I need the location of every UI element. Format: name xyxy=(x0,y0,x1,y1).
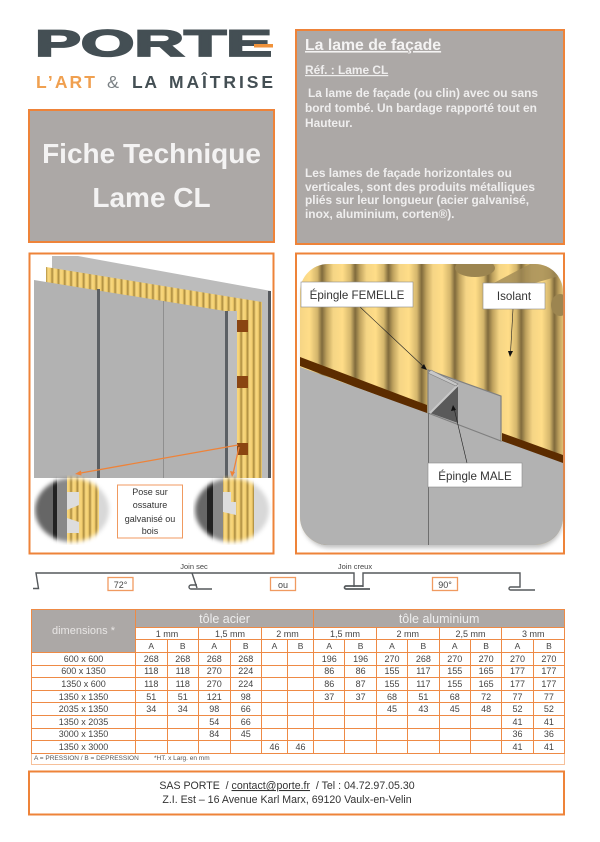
contact text: Z.I. Est – 16 Avenue Karl Marx, 69120 Vaulx-en-Velin xyxy=(162,794,412,806)
pressure table: A xyxy=(452,641,458,651)
pressure table: 1 mm xyxy=(156,628,178,638)
pressure table xyxy=(31,609,565,765)
pressure table: B xyxy=(483,641,489,651)
profile line xyxy=(33,573,535,590)
pressure table: 270 xyxy=(207,679,222,689)
pressure table: 41 xyxy=(544,717,554,727)
description text: Hauteur. xyxy=(305,116,353,130)
detail circle left xyxy=(30,475,115,545)
pressure table: 98 xyxy=(241,692,251,702)
pressure table: A xyxy=(515,641,520,651)
pressure table: B xyxy=(421,641,426,651)
pressure table: dimensions * xyxy=(52,625,115,637)
logo: PORTE xyxy=(35,23,273,92)
callout: pose xyxy=(118,485,182,538)
pressure table: 165 xyxy=(479,679,494,689)
profile diagram xyxy=(33,562,535,590)
detail circle right xyxy=(190,475,275,545)
description text: Les lames de façade horizontales ou xyxy=(305,166,512,180)
pressure table: 68 xyxy=(387,692,397,702)
male clip xyxy=(428,370,501,441)
pressure table: 224 xyxy=(238,666,253,676)
label: épingle femelle: Épingle FEMELLE xyxy=(310,289,405,302)
pressure table: 1,5 mm xyxy=(330,628,360,638)
pressure table: 52 xyxy=(512,704,523,714)
pressure table: A xyxy=(389,641,395,651)
pressure table: 48 xyxy=(481,704,491,714)
pressure table: 118 xyxy=(176,679,190,689)
pressure table: 52 xyxy=(544,704,554,714)
label: épingle male xyxy=(428,463,522,487)
pressure table: 2035 x 1350 xyxy=(59,704,108,714)
pressure table: 600 x 1350 xyxy=(61,666,106,676)
pressure table: 45 xyxy=(241,729,251,739)
label: épingle femelle xyxy=(301,282,413,307)
title text xyxy=(42,138,261,213)
arrow: épingle male xyxy=(451,405,467,463)
pressure table: 117 xyxy=(416,679,431,689)
contact text xyxy=(159,780,415,806)
pressure table: 155 xyxy=(384,679,400,689)
pressure table: 600 x 600 xyxy=(64,654,103,664)
pressure table: 51 xyxy=(146,692,156,702)
pressure table: 177 xyxy=(541,666,556,676)
pressure table: 270 xyxy=(510,654,525,664)
pressure table: 118 xyxy=(176,666,190,676)
label: 72 degrees xyxy=(108,578,133,590)
pressure table: 66 xyxy=(241,717,251,727)
arrow to left detail xyxy=(75,445,238,476)
description text: inox, aluminium, corten®). xyxy=(305,207,454,221)
description text: La lame de façade (ou clin) avec ou sans xyxy=(308,86,538,100)
label: 90 degrees: 90° xyxy=(438,580,452,590)
label: 90 degrees xyxy=(432,578,458,590)
callout: pose: ossature xyxy=(133,500,167,510)
logo tagline: L’ART xyxy=(36,72,95,92)
title text: Lame CL xyxy=(92,182,211,213)
pressure table: 155 xyxy=(384,666,400,676)
pressure table: 1350 x 2035 xyxy=(59,717,108,727)
label: isolant xyxy=(483,283,545,309)
label: 72 degrees: 72° xyxy=(114,580,128,590)
pressure table: 224 xyxy=(238,679,253,689)
pressure table: 270 xyxy=(207,666,222,676)
pressure table: 2 mm xyxy=(276,628,299,638)
pressure table: 77 xyxy=(512,692,523,702)
description text: bord tombé. Un bardage rapporté tout en xyxy=(305,101,537,115)
pressure table: 196 xyxy=(322,654,337,664)
callout: pose: galvanisé ou xyxy=(125,514,175,524)
pressure table: 36 xyxy=(544,729,554,739)
pressure table: 51 xyxy=(418,692,428,702)
label: ou: ou xyxy=(278,580,288,590)
pressure table: 77 xyxy=(544,692,554,702)
title text: Fiche Technique xyxy=(42,138,261,169)
pressure table: 2 mm xyxy=(396,628,419,638)
arrow to right detail xyxy=(230,447,239,477)
logo tagline xyxy=(36,71,273,92)
pressure table: 117 xyxy=(416,666,431,676)
pressure table: 72 xyxy=(481,692,491,702)
pressure table: 270 xyxy=(541,654,556,664)
label: join creux: Join creux xyxy=(338,562,372,571)
pressure table: 1,5 mm xyxy=(215,628,245,638)
pressure table: 37 xyxy=(324,692,334,702)
pressure table: 121 xyxy=(207,692,222,702)
pressure table: A xyxy=(211,641,217,651)
pressure table: 36 xyxy=(512,729,523,739)
pressure table: 43 xyxy=(418,704,428,714)
pressure table: 1350 x 3000 xyxy=(59,742,108,752)
pressure table: tôle aluminium xyxy=(399,612,479,626)
label: isolant: Isolant xyxy=(497,290,532,303)
contact footer xyxy=(29,772,564,814)
pressure table: 270 xyxy=(479,654,494,664)
reference: Réf. : Lame CL xyxy=(305,63,388,77)
panel: wall assembly xyxy=(30,254,275,554)
pressure table: 54 xyxy=(209,717,219,727)
pressure table: 177 xyxy=(541,679,556,689)
pressure table: B xyxy=(298,641,303,651)
pressure table: 3000 x 1350 xyxy=(59,729,108,739)
pressure table: 165 xyxy=(479,666,494,676)
logo tagline: MAÎTRISE xyxy=(169,71,273,92)
pressure table: 268 xyxy=(238,654,253,664)
pressure table: 270 xyxy=(384,654,400,664)
joint illustration xyxy=(300,259,569,545)
pressure table: 41 xyxy=(544,742,554,752)
pressure table: 118 xyxy=(144,679,158,689)
pressure table: 177 xyxy=(510,679,525,689)
pressure table: 2,5 mm xyxy=(455,628,485,638)
pressure table: 84 xyxy=(209,729,219,739)
pressure table: 41 xyxy=(512,717,523,727)
pressure table: A xyxy=(148,641,154,651)
pressure table: 98 xyxy=(209,704,219,714)
title panel xyxy=(29,110,274,242)
description heading: La lame de façade xyxy=(305,37,441,54)
pressure table: B xyxy=(358,641,363,651)
wall illustration xyxy=(34,256,271,478)
pressure table: tôle acier xyxy=(199,612,250,626)
label: join sec: Join sec xyxy=(180,562,208,571)
arrow: isolant xyxy=(508,309,513,357)
pressure table: 37 xyxy=(356,692,366,702)
pressure table: 177 xyxy=(510,666,525,676)
pressure table: 268 xyxy=(207,654,222,664)
pressure table: 34 xyxy=(146,704,156,714)
pressure table: 46 xyxy=(296,742,306,752)
pressure table: 268 xyxy=(144,654,159,664)
description text: verticales, sont des produits métalliques xyxy=(305,180,535,194)
arrow: épingle femelle xyxy=(360,307,427,370)
logo tagline: LA xyxy=(132,72,157,92)
pressure table: 1350 x 600 xyxy=(61,679,106,689)
pressure table: A = PRESSION / B = DEPRESSION xyxy=(34,755,139,762)
pressure table: 155 xyxy=(447,679,462,689)
label: épingle male: Épingle MALE xyxy=(438,470,512,483)
logo tagline: & xyxy=(107,72,119,92)
pressure table: 270 xyxy=(447,654,462,664)
pressure table: 41 xyxy=(512,742,523,752)
pressure table: 3 mm xyxy=(522,628,544,638)
pressure table: 86 xyxy=(324,679,334,689)
pressure table: 45 xyxy=(387,704,397,714)
pressure table: *HT. x Larg. en mm xyxy=(154,755,210,762)
pressure table: 46 xyxy=(269,742,280,752)
panel: description xyxy=(296,30,564,244)
pressure table: B xyxy=(546,641,552,651)
pressure table: 86 xyxy=(356,666,366,676)
panel: joint detail xyxy=(296,254,569,554)
brackets xyxy=(237,320,248,455)
description text: pliés sur leur longueur (acier galvanisé, xyxy=(305,193,529,207)
pressure table: 87 xyxy=(356,679,366,689)
description text xyxy=(305,86,538,221)
pressure table: 155 xyxy=(447,666,462,676)
logo wordmark: PORTE xyxy=(35,23,272,64)
contact text: SAS PORTE / contact@porte.fr / Tel : 04.72.97.05.30 xyxy=(159,780,415,792)
label: ou xyxy=(270,578,296,590)
pressure table: 268 xyxy=(175,654,190,664)
pressure table: 1350 x 1350 xyxy=(59,692,108,702)
pressure table: 86 xyxy=(324,666,334,676)
pressure table: 196 xyxy=(353,654,368,664)
pressure table: 34 xyxy=(178,704,188,714)
pressure table: B xyxy=(180,641,186,651)
pressure table: 66 xyxy=(241,704,251,714)
callout: pose: Pose sur xyxy=(132,487,168,497)
pressure table: A xyxy=(272,641,277,651)
pressure table: A xyxy=(326,641,332,651)
pressure table: 118 xyxy=(144,666,158,676)
pressure table: 51 xyxy=(178,692,188,702)
callout: pose: bois xyxy=(142,526,159,536)
pressure table: 68 xyxy=(450,692,460,702)
pressure table: 268 xyxy=(416,654,431,664)
pressure table: B xyxy=(243,641,249,651)
pressure table: 45 xyxy=(450,704,460,714)
